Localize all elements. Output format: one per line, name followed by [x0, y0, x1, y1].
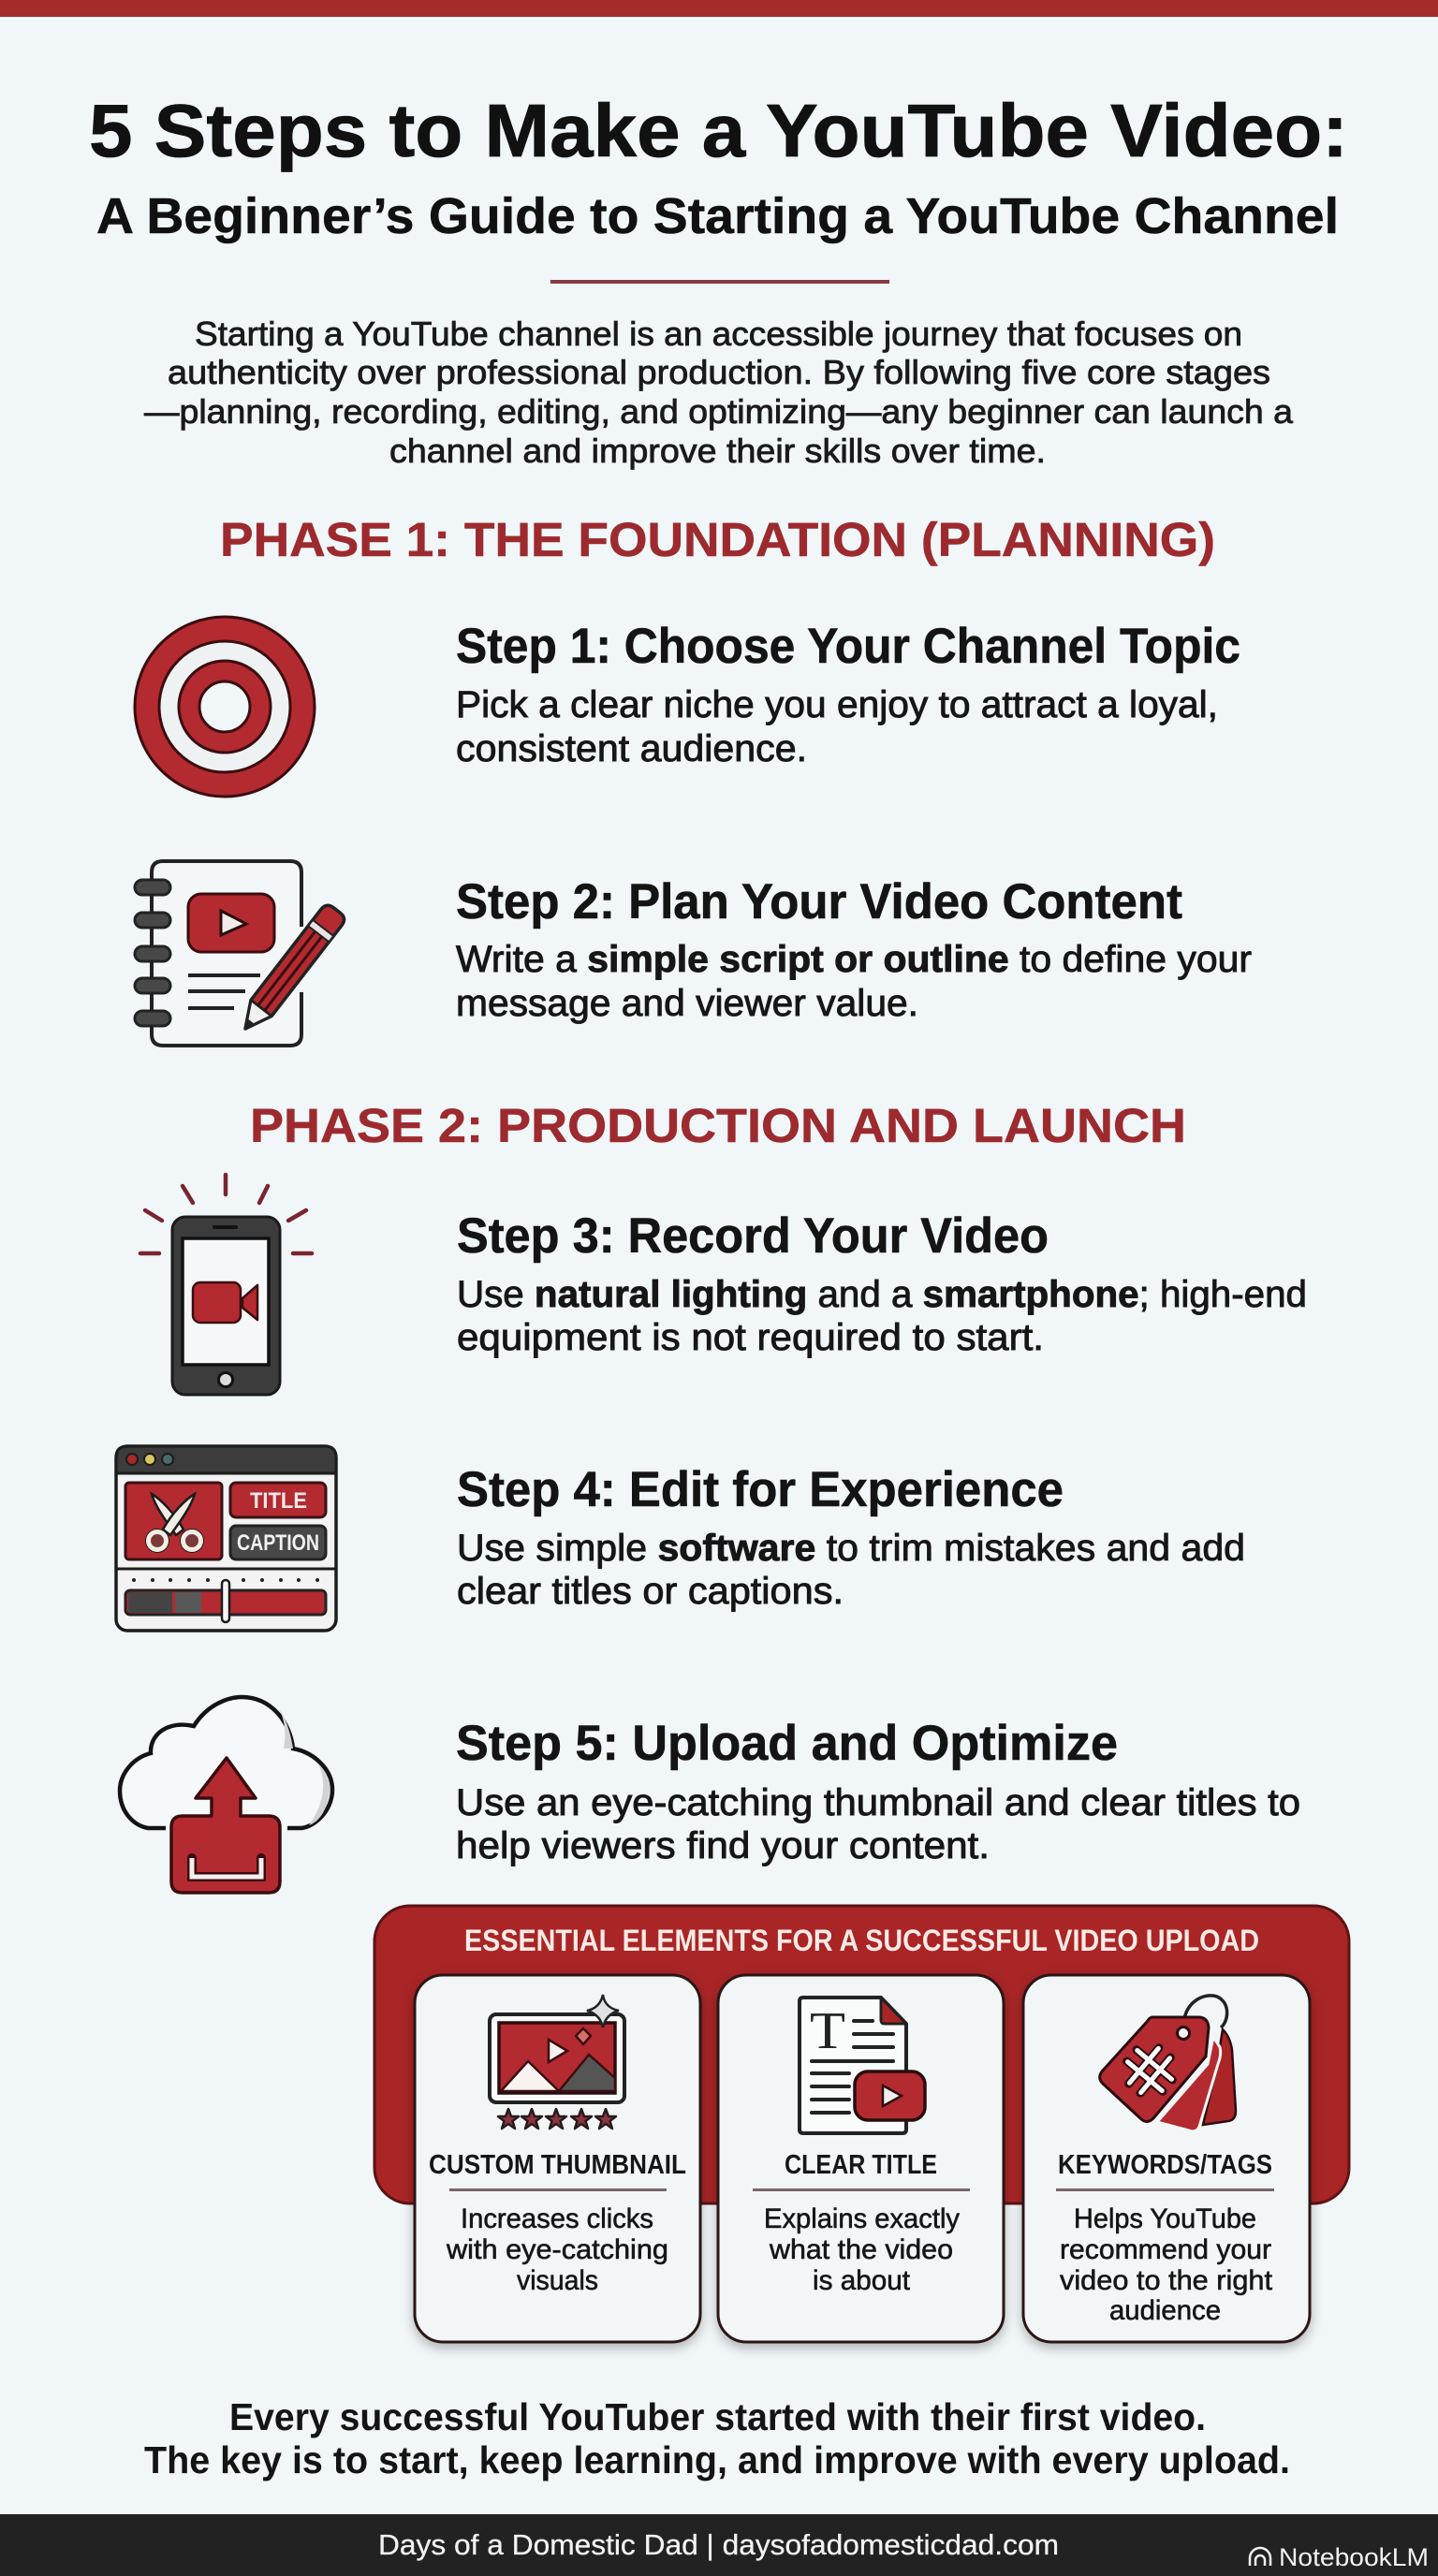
title: 5 Steps to Make a YouTube Video:: [89, 89, 1348, 172]
icon: hashtag price tags: [1100, 1996, 1236, 2131]
card: clear title: what the video: [769, 2234, 953, 2265]
icon: document with play button: [800, 1998, 925, 2133]
card: custom thumbnail: [415, 1975, 700, 2342]
intro paragraph: [144, 315, 1294, 470]
step 5: [456, 1716, 1300, 1866]
step 3: equipment is not required to start.: [457, 1317, 1044, 1358]
closing message: [144, 2395, 1290, 2481]
card: clear title: [718, 1975, 1004, 2342]
phase 2 heading: PHASE 2: PRODUCTION AND LAUNCH: [250, 1099, 1186, 1152]
subtitle: A Beginner’s Guide to Starting a YouTube Channel: [96, 188, 1339, 244]
step 1: [456, 619, 1240, 769]
footer bar: [0, 2514, 1438, 2576]
step 3: [457, 1208, 1307, 1358]
step 1: Step 1: Choose Your Channel Topic: [456, 619, 1240, 674]
closing message: The key is to start, keep learning, and improve with every upload.: [144, 2438, 1290, 2481]
card: custom thumbnail: with eye-catching: [446, 2234, 668, 2265]
step 5: Step 5: Upload and Optimize: [456, 1716, 1118, 1771]
panel: essential elements: [374, 1906, 1349, 2342]
step 2: [456, 874, 1252, 1024]
card: keywords and tags: Helps YouTube: [1074, 2203, 1256, 2234]
icon: notebook and pencil: [135, 861, 347, 1046]
icon: target: [135, 617, 315, 797]
panel heading: ESSENTIAL ELEMENTS FOR A SUCCESSFUL VIDEO UPLOAD: [464, 1924, 1259, 1957]
step 1: Pick a clear niche you enjoy to attract a loyal,: [456, 684, 1218, 725]
step 2: Step 2: Plan Your Video Content: [456, 874, 1182, 929]
closing message: Every successful YouTuber started with their first video.: [229, 2395, 1206, 2438]
card: keywords and tags: recommend your: [1060, 2234, 1271, 2265]
step 3: Step 3: Record Your Video: [457, 1208, 1049, 1264]
intro paragraph: Starting a YouTube channel is an accessible journey that focuses on: [195, 315, 1242, 353]
step 5: Use an eye-catching thumbnail and clear titles to: [456, 1782, 1300, 1823]
card: keywords and tags: KEYWORDS/TAGS: [1058, 2150, 1272, 2180]
step 5: help viewers find your content.: [456, 1825, 990, 1866]
icon: smartphone recording: [140, 1175, 312, 1395]
phase 1 heading: PHASE 1: THE FOUNDATION (PLANNING): [220, 513, 1215, 566]
icon: video editor window: CAPTION: [237, 1530, 319, 1556]
NotebookLM mark: NotebookLM: [1279, 2543, 1429, 2571]
step 4: [457, 1462, 1245, 1612]
step 4: Use simple software to trim mistakes and add: [457, 1528, 1245, 1569]
step 3: Use natural lighting and a smartphone; high-end: [457, 1274, 1307, 1315]
icon: scissors: [145, 1494, 204, 1553]
icon: cloud upload: [120, 1697, 332, 1893]
top bar: [0, 0, 1438, 17]
card: clear title: is about: [813, 2265, 911, 2296]
card: keywords and tags: audience: [1109, 2295, 1221, 2326]
intro paragraph: —planning, recording, editing, and optimizing—any beginner can launch a: [144, 392, 1294, 431]
card: custom thumbnail: visuals: [517, 2265, 598, 2296]
footer bar: Days of a Domestic Dad | daysofadomesticdad.com: [378, 2528, 1059, 2561]
step 2: Write a simple script or outline to define your: [456, 939, 1252, 980]
icon: video editor window: TITLE: [250, 1488, 307, 1514]
intro paragraph: authenticity over professional production. By following five core stages: [168, 353, 1270, 391]
step 4: clear titles or captions.: [457, 1571, 844, 1612]
card: keywords and tags: video to the right: [1060, 2265, 1273, 2296]
icon: document with play button: T: [810, 2002, 845, 2060]
step 1: consistent audience.: [456, 728, 807, 769]
card: clear title: CLEAR TITLE: [785, 2150, 937, 2180]
step 4: Step 4: Edit for Experience: [457, 1462, 1064, 1517]
card: clear title: Explains exactly: [764, 2203, 960, 2234]
icon: video editor window: [116, 1446, 336, 1631]
icon: thumbnail image: [490, 1995, 624, 2129]
step 2: message and viewer value.: [456, 983, 918, 1024]
card: custom thumbnail: CUSTOM THUMBNAIL: [429, 2150, 686, 2180]
card: custom thumbnail: Increases clicks: [461, 2203, 653, 2234]
card: keywords and tags: [1023, 1975, 1310, 2342]
intro paragraph: channel and improve their skills over time.: [389, 432, 1046, 470]
